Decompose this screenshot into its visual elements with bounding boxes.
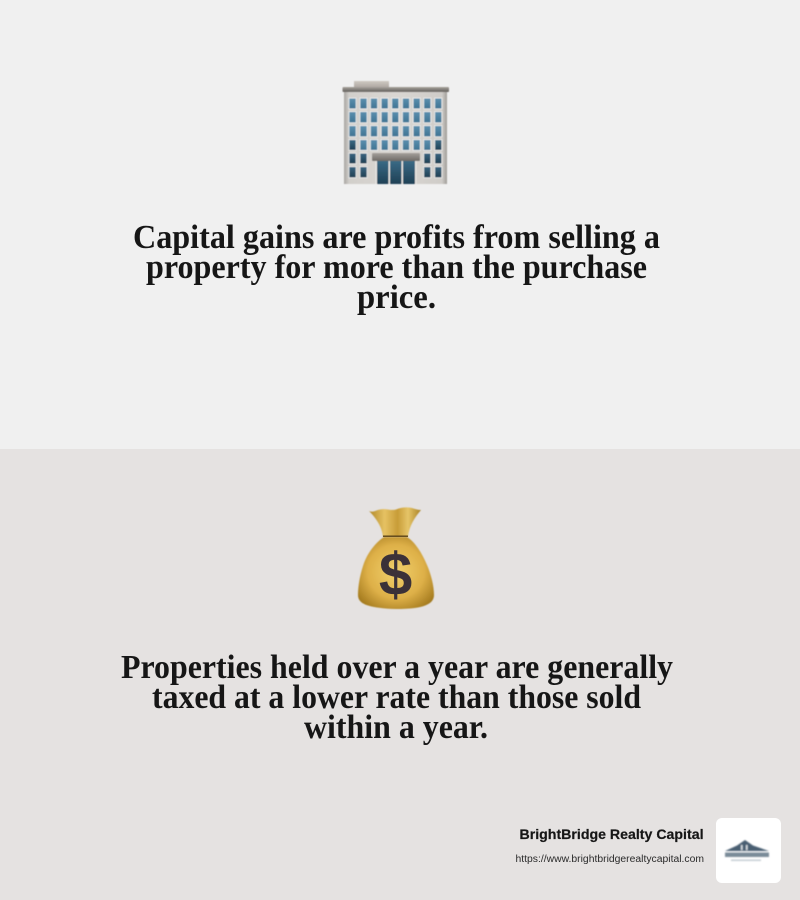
icon: office building (342, 81, 449, 184)
icon: money bag (358, 507, 434, 609)
heading: holding period statement: Properties held over a year are generally (121, 649, 673, 686)
icon: money bag: $ (379, 541, 412, 608)
heading: capital gains statement: price. (357, 279, 436, 316)
heading: capital gains statement: Capital gains are profits from selling a (133, 219, 660, 256)
website url: https://www.brightbridgerealtycapital.com (516, 854, 704, 865)
icon: brightbridge logo (725, 840, 769, 861)
heading: holding period statement: taxed at a lower rate than those sold (152, 679, 641, 716)
panel: holding period tax rate (0, 449, 800, 900)
logo card (716, 818, 781, 883)
heading: capital gains statement (133, 219, 660, 316)
brand name: BrightBridge Realty Capital (520, 826, 704, 842)
heading: holding period statement: within a year. (304, 709, 488, 746)
heading: holding period statement (121, 649, 673, 746)
panel: capital gains definition (0, 0, 800, 449)
heading: capital gains statement: property for more than the purchase (146, 249, 647, 286)
